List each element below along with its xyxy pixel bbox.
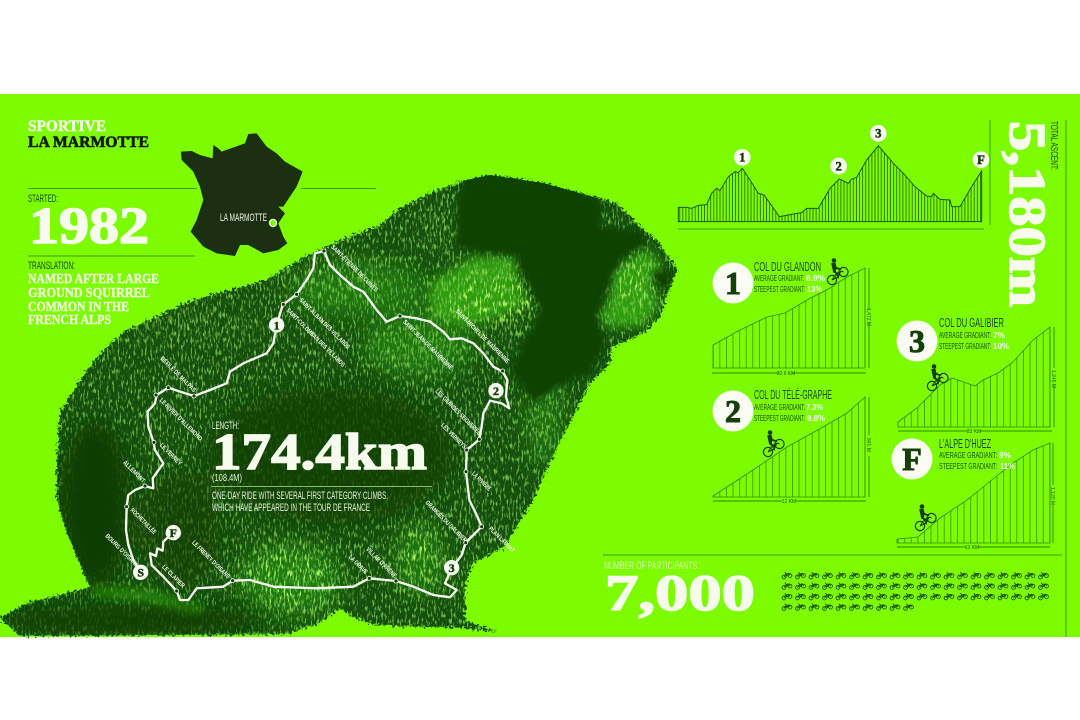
climb 3: Col du Galibier: 1,245 M: [1050, 370, 1056, 388]
climb F: L'Alpe d'Huez: 1,120 M: [1049, 487, 1055, 505]
place names: SAINT-MICHEL DE MAURIENNE: [454, 308, 510, 365]
climb 1: Col du Glandon: 22.6 KM: [777, 371, 795, 377]
place names: ROCHETAILLÉE: [129, 506, 159, 536]
translation block: FRENCH ALPS: [28, 312, 111, 327]
profile markers: 1: [739, 151, 745, 165]
participants count: [604, 560, 755, 622]
frame lines: [603, 120, 1066, 637]
translation block: NAMED AFTER LARGE: [28, 271, 159, 286]
climb 1: Col du Glandon: 13%: [807, 285, 822, 294]
place names: LES VERNEYS: [439, 422, 468, 450]
marmot illustration: [0, 170, 680, 640]
climb 3: Col du Galibier: AVERAGE GRADIANT:: [939, 331, 991, 340]
place names: LE VERNEY: [158, 442, 183, 468]
overall elevation profile chart: [678, 125, 989, 222]
map location marker: [269, 219, 277, 227]
climb 3: Col du Galibier: COL DU GALIBIER: [939, 315, 1004, 330]
length callout: WHICH HAVE APPEARED IN THE TOUR DE FRANCE: [212, 502, 370, 514]
climb 3: Col du Galibier: 33 KM: [967, 429, 981, 435]
total ascent: TOTAL ASCENT:: [1048, 121, 1060, 170]
title: LA MARMOTTE: [28, 134, 149, 151]
participants count: NUMBER OF PARTICIPANTS :: [604, 560, 701, 572]
climb F: L'Alpe d'Huez: STEEPEST GRADIANT:: [939, 462, 997, 471]
climb F: L'Alpe d'Huez: 9%: [999, 451, 1011, 460]
climb F: L'Alpe d'Huez: L'ALPE D'HUEZ: [939, 436, 991, 451]
climb 1: Col du Glandon: 1,472 M: [865, 308, 871, 326]
climb 2: Col du Télé-graphe: 7.3%: [806, 403, 823, 412]
title: SPORTIVE: [28, 118, 106, 135]
route line: [126, 251, 509, 600]
place names: PLAN LACHAT: [487, 525, 516, 554]
place names: LE RIVIER D'ALLEMOND: [158, 397, 204, 443]
place names: LE FRENEY D'OISANS: [190, 539, 231, 580]
route markers: F: [170, 526, 177, 540]
translation block: COMMON IN THE: [28, 299, 129, 314]
place names: [104, 242, 516, 590]
title: [28, 118, 149, 151]
profile markers: [734, 125, 989, 174]
climb 3: Col du Galibier: 3: [909, 323, 925, 359]
length callout: LENGTH:: [212, 420, 239, 432]
route map: [104, 242, 516, 600]
started block: STARTED:: [28, 193, 58, 205]
place names: BOURG D'OISANS: [104, 533, 140, 569]
place names: LES GRANDES SEIGNERIES: [434, 388, 482, 437]
marmot tail highlight: [92, 588, 205, 612]
route markers: 3: [449, 561, 455, 575]
place names: SAINT-COLOMBAN DES VILLARDS: [285, 307, 346, 369]
place names: GRANGES DU GALIBIER: [424, 499, 468, 544]
profile markers: 3: [875, 127, 881, 141]
translation block: GROUND SQUIRREL: [28, 285, 150, 300]
place names: LA GRAVE: [347, 554, 369, 576]
place names: VILLAR D'ARÈNE: [364, 545, 399, 580]
profile markers: F: [977, 153, 985, 167]
climb F: L'Alpe d'Huez: AVERAGE GRADIANT:: [939, 451, 997, 460]
place names: LA RIVIÈRE: [470, 469, 494, 493]
marmot fur texture: [0, 170, 680, 640]
map of France: [181, 133, 303, 256]
participants count: 7,000: [605, 566, 755, 622]
route markers: S: [137, 566, 144, 580]
divider line: [28, 188, 376, 256]
length callout: (108.4M): [212, 472, 242, 484]
place names: LE CLAPIER: [160, 564, 186, 590]
translation block: TRANSLATION:: [28, 260, 75, 272]
place names: SAINT-JEAN-DE-MAURIENNE: [401, 319, 454, 372]
place names: ALLEMONT: [121, 459, 146, 485]
place names: SAINT-ALBAN DES VILLARDS: [298, 297, 351, 351]
climb 1: Col du Glandon: 6.9%: [806, 274, 825, 283]
total ascent: 5,180m: [998, 121, 1055, 307]
climb 2: Col du Télé-graphe: 12 KM: [782, 499, 796, 505]
climb 2: Col du Télé-graphe: STEEPEST GRADIANT:: [754, 414, 805, 423]
climb 3: Col du Galibier: 7%: [993, 331, 1005, 340]
climb 2: Col du Télé-graphe: 841 M: [865, 438, 871, 452]
climb F: L'Alpe d'Huez: 13 KM: [965, 545, 979, 551]
length callout: [212, 420, 432, 514]
climb 2: Col du Télé-graphe: 9.8%: [807, 414, 825, 423]
climb F: L'Alpe d'Huez: [892, 436, 1055, 551]
climb 1: Col du Glandon: [712, 258, 871, 377]
length callout: 174.4km: [212, 424, 427, 481]
length callout: ONE-DAY RIDE WITH SEVERAL FIRST CATEGORY CLIMBS,: [212, 490, 388, 502]
climb 3: Col du Galibier: [896, 315, 1056, 435]
climb 3: Col du Galibier: STEEPEST GRADIANT:: [939, 342, 991, 351]
marmot belly and flank shading: [0, 387, 455, 634]
climb 3: Col du Galibier: 10%: [993, 342, 1009, 351]
place names: DÉFILÉ DE MALPAS: [159, 354, 198, 394]
route markers: [133, 317, 504, 580]
climb 1: Col du Glandon: COL DU GLANDON: [754, 259, 821, 274]
route markers: 1: [274, 318, 280, 332]
climb 2: Col du Télé-graphe: COL DU TÉLÉ-GRAPHE: [754, 387, 832, 402]
translation block: [28, 260, 159, 327]
climb 1: Col du Glandon: AVERAGE GRADIANT:: [754, 274, 804, 283]
route stops: [125, 249, 505, 593]
background panel: [0, 94, 1080, 637]
climb 2: Col du Télé-graphe: [712, 387, 871, 505]
participants bike pictogram grid: [782, 572, 1048, 610]
started block: 1982: [29, 198, 149, 255]
climb 2: Col du Télé-graphe: AVERAGE GRADIANT:: [754, 403, 805, 412]
climb F: L'Alpe d'Huez: F: [902, 441, 922, 477]
profile markers: 2: [836, 159, 842, 173]
map label: LA MARMOTTE: [220, 212, 267, 224]
route markers: 2: [493, 384, 499, 398]
climb 2: Col du Télé-graphe: 2: [725, 393, 741, 429]
climb 1: Col du Glandon: STEEPEST GRADIANT:: [754, 285, 805, 294]
climb 1: Col du Glandon: 1: [725, 265, 741, 301]
place names: SAINT-ÉTIENNE DE CUINES: [329, 242, 380, 294]
climb F: L'Alpe d'Huez: 11%: [1000, 462, 1015, 471]
marmot head dark shading: [457, 170, 676, 403]
